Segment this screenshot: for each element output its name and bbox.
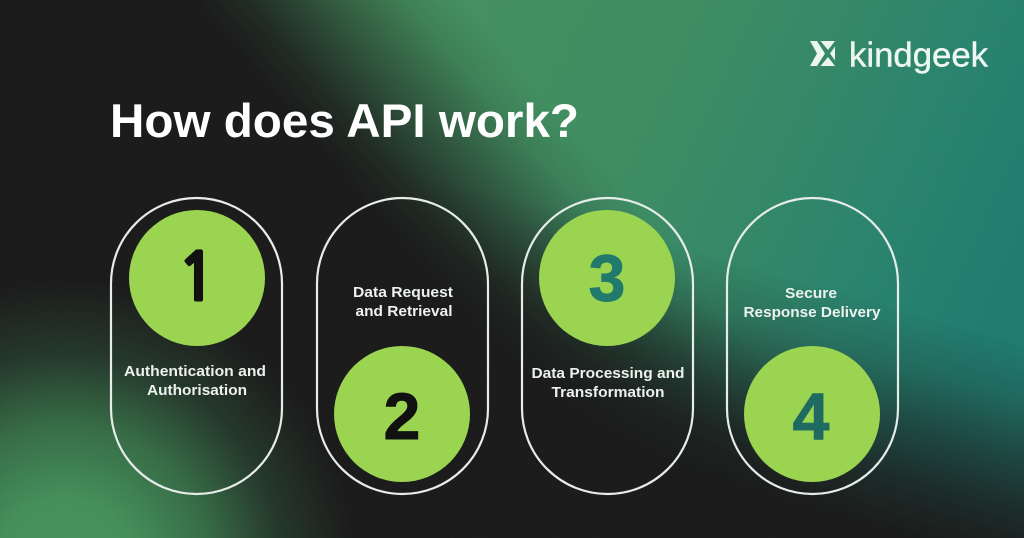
wordmark: kindgeek	[849, 36, 989, 74]
pill outline	[317, 198, 488, 494]
number circle	[334, 346, 470, 482]
number: 3	[589, 241, 625, 315]
label: Transformation	[552, 385, 664, 401]
label: Data Processing and	[532, 366, 684, 382]
logo: kindgeek	[810, 36, 989, 74]
step 1	[111, 198, 282, 494]
number: 4	[793, 379, 830, 453]
label: Response Delivery	[744, 305, 880, 321]
icon: kindgeek chevrons	[810, 41, 835, 66]
label: and Retrieval	[356, 304, 452, 320]
pill outline	[727, 198, 898, 494]
step 2	[317, 198, 488, 494]
step 3	[522, 198, 693, 494]
label: Authorisation	[147, 383, 247, 399]
number circle	[744, 346, 880, 482]
title: How does API work?	[110, 95, 579, 148]
pill outline	[111, 198, 282, 494]
number: 2	[384, 379, 420, 453]
label: Authentication and	[124, 364, 266, 380]
label: Data Request	[353, 285, 453, 301]
number: 1	[177, 244, 217, 310]
step 4	[727, 198, 898, 494]
number circle	[129, 210, 265, 346]
pill outline	[522, 198, 693, 494]
label: Secure	[785, 286, 837, 302]
number circle	[539, 210, 675, 346]
